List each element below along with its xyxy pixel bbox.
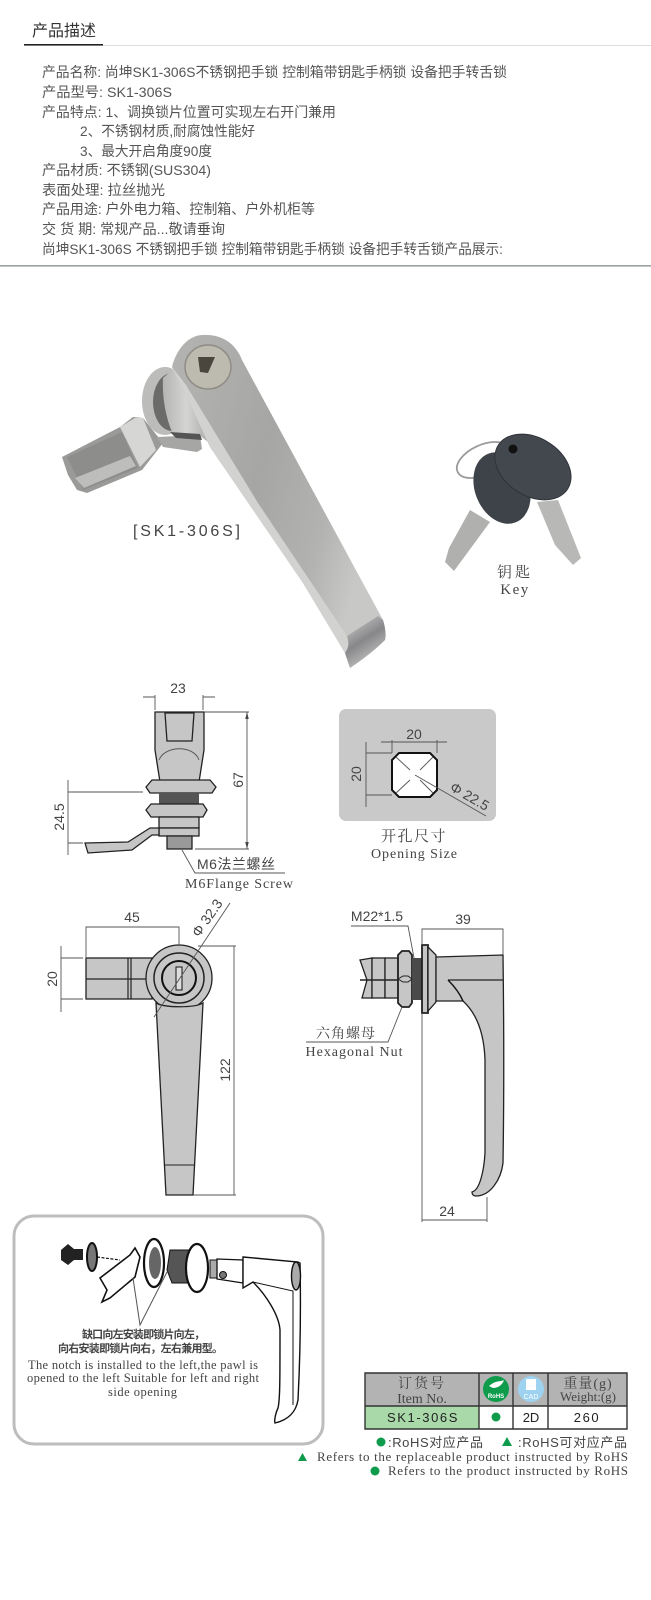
product description text: 交 货 期: 常规产品...敬请垂询: [42, 221, 225, 237]
drawing: side view with dimensions: [51, 680, 249, 855]
table: item specification: 重量(g): [563, 1376, 613, 1392]
product description text: 3、最大开启角度90度: [80, 143, 212, 159]
exploded diagram: [61, 1239, 300, 1423]
label: flange screw: [182, 850, 294, 892]
key blades: [445, 510, 490, 571]
note text: 缺口向左安装即锁片向左，: [82, 1327, 205, 1341]
key label: Key: [500, 582, 530, 598]
table: item specification: [365, 1373, 627, 1429]
label: hexagonal nut: [306, 1007, 403, 1060]
lock cylinder: [185, 345, 231, 389]
dimension 24.5: 24.5: [51, 803, 67, 831]
drawing: front view with dimensions: [44, 896, 236, 1195]
product description text: [42, 64, 507, 257]
opening size label: [371, 827, 457, 862]
product description text: 表面处理: 拉丝抛光: [42, 182, 165, 198]
table: item specification: Weight:(g): [560, 1389, 616, 1404]
table: item specification: SK1-306S: [387, 1410, 459, 1425]
dimension 122: 122: [217, 1058, 233, 1082]
dimension 23: 23: [170, 680, 186, 696]
icon: RoHS: RoHS: [488, 1394, 504, 1400]
dimension M22: M22*1.5: [351, 908, 403, 924]
note text: The notch is installed to the left,the pawl is: [28, 1358, 258, 1372]
pawl: [62, 417, 163, 493]
panel: installation note: [14, 1216, 323, 1444]
table: item specification: 2D: [523, 1410, 539, 1425]
RoHS legend: Refers to the product instructed by RoHS: [388, 1463, 628, 1478]
dimension 45: 45: [124, 909, 140, 925]
table: item specification: 订货号: [398, 1375, 446, 1392]
key heads: [463, 444, 541, 532]
collar: [142, 367, 188, 435]
panel: opening size: 20: [348, 766, 364, 782]
RoHS legend: [298, 1435, 628, 1478]
icon: CAD: CAD: [524, 1394, 538, 1401]
product description text: 产品材质: 不锈钢(SUS304): [42, 162, 211, 178]
dimension 32.3: [154, 903, 230, 1017]
note text: [27, 1327, 260, 1399]
ring: [451, 435, 515, 485]
section heading: 产品描述: [32, 22, 96, 40]
key label: [497, 564, 533, 598]
label: flange screw: M6法兰螺丝: [197, 856, 275, 872]
RoHS legend: :RoHS对应产品: [388, 1435, 483, 1450]
key label: 钥匙: [497, 564, 533, 581]
body: [155, 712, 204, 782]
label: hexagonal nut: Hexagonal Nut: [306, 1045, 403, 1060]
note text: opened to the left Suitable for left and right: [27, 1371, 260, 1385]
icon: CAD: [518, 1376, 544, 1402]
RoHS legend: Refers to the replaceable product instructed by RoHS: [317, 1449, 628, 1464]
table: item specification: 260: [574, 1410, 600, 1425]
opening size label: Opening Size: [371, 847, 457, 862]
dimension 67: 67: [230, 772, 246, 788]
dimension 39: 39: [455, 911, 471, 927]
handle body: [172, 335, 386, 668]
product description text: 尚坤SK1-306S 不锈钢把手锁 控制箱带钥匙手柄锁 设备把手转舌锁产品展示:: [42, 241, 503, 257]
keys photo: [445, 421, 583, 571]
panel: opening size: 20: [406, 726, 422, 742]
product photo: handle lock: [62, 335, 386, 668]
divider: [0, 265, 651, 267]
drawing: profile view with dimensions: [351, 908, 504, 1222]
panel: opening size: [339, 709, 496, 821]
note text: side opening: [108, 1385, 178, 1399]
drawing: front view with dimensions: Φ 32.3: [188, 896, 226, 940]
model label: [SK1-306S]: [133, 523, 240, 540]
product description text: 2、不锈钢材质,耐腐蚀性能好: [80, 123, 255, 139]
table: item specification: Item No.: [397, 1392, 447, 1407]
product description text: 产品名称: 尚坤SK1-306S不锈钢把手锁 控制箱带钥匙手柄锁 设备把手转舌锁: [42, 64, 507, 80]
icon: RoHS: [483, 1376, 509, 1402]
label: flange screw: M6Flange Screw: [185, 877, 294, 892]
pawl: [85, 828, 159, 853]
product description text: 产品型号: SK1-306S: [42, 84, 172, 100]
product description text: 产品用途: 户外电力箱、控制箱、户外机柜等: [42, 201, 315, 217]
label: hexagonal nut: 六角螺母: [316, 1025, 376, 1042]
RoHS legend: :RoHS可对应产品: [518, 1435, 627, 1450]
dimension 20: 20: [44, 971, 60, 987]
panel: opening size: Φ 22.5: [448, 779, 492, 814]
opening size label: 开孔尺寸: [381, 827, 447, 845]
note text: 向右安装即锁片向右，左右兼用型。: [58, 1341, 223, 1355]
dimension 24: 24: [439, 1203, 455, 1219]
product description text: 产品特点: 1、调换锁片位置可实现左右开门兼用: [42, 104, 336, 120]
